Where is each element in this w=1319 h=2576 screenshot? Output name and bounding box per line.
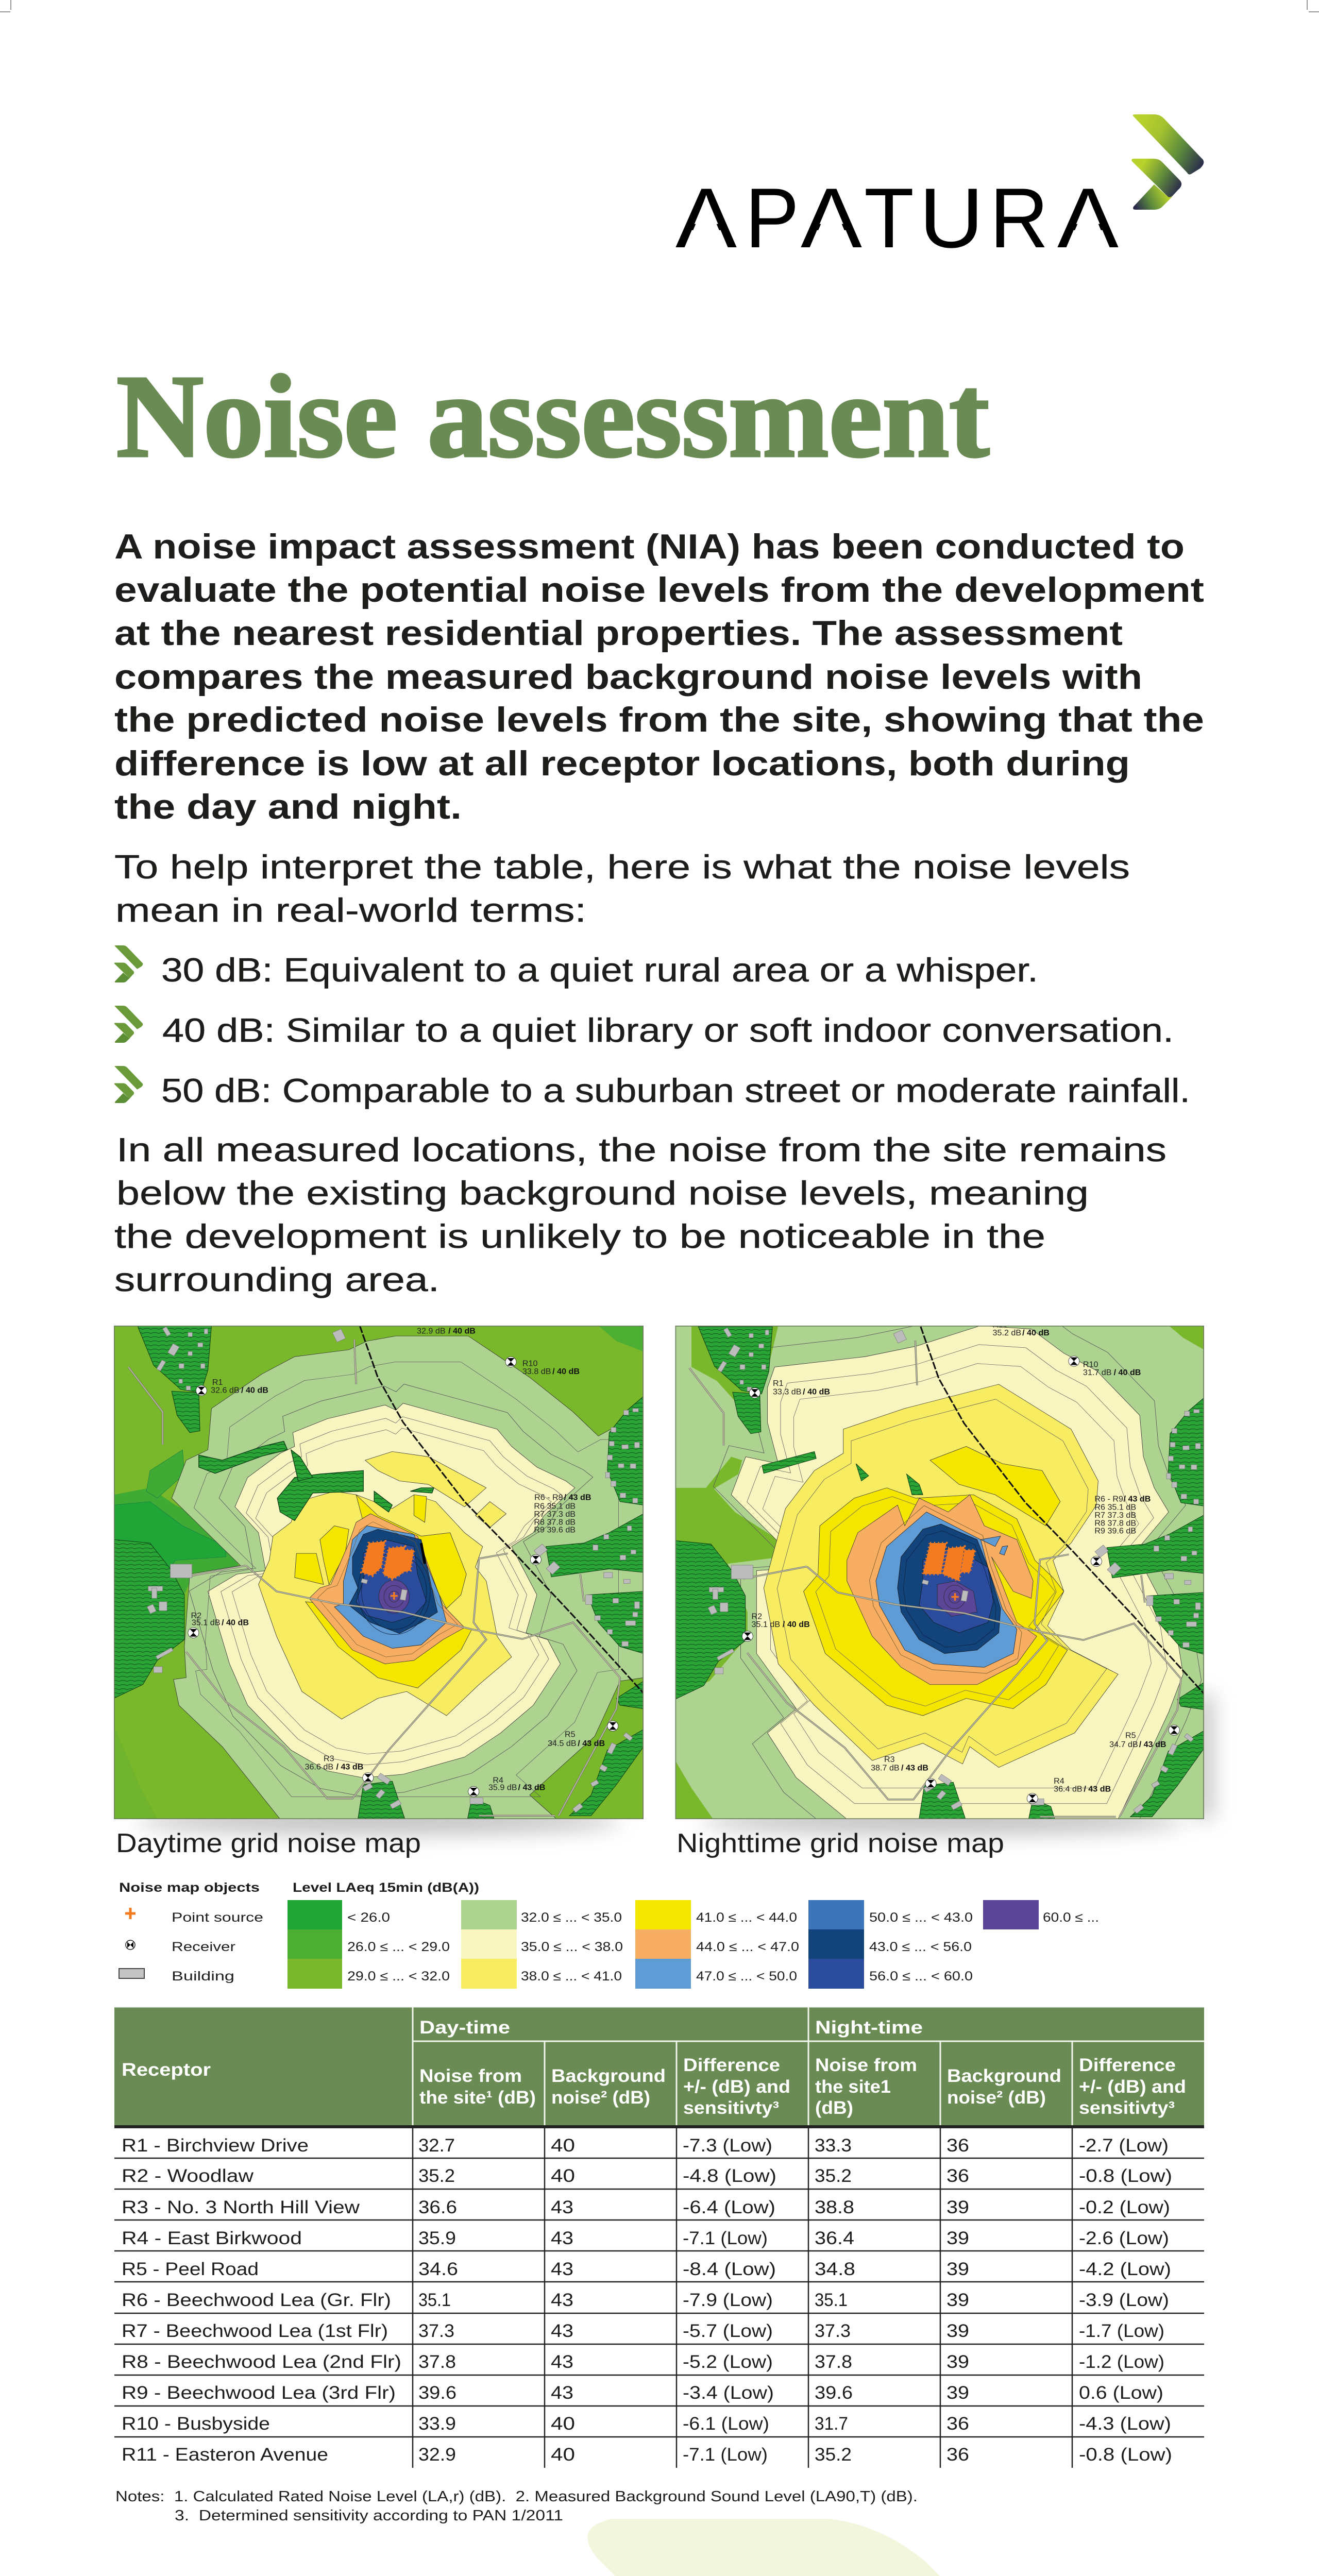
table row: R6: 43 — [551, 2290, 573, 2310]
caption: nighttime map: Nighttime grid noise map — [677, 1828, 1004, 1858]
logo: Apatura wordmark and chevron: R — [990, 171, 1049, 265]
icon: bullet chevron 50 dB — [114, 1066, 143, 1103]
map: sources array — [362, 1541, 414, 1579]
map band: 35-38 dB — [208, 1403, 575, 1778]
conclusion paragraph: the development is unlikely to be noticeable in the — [114, 1217, 1045, 1255]
table: noise levels by receptor — [114, 2007, 1204, 2468]
map labels: / 43 dB — [1124, 1495, 1151, 1504]
map band: 53-56 dB — [349, 1529, 437, 1634]
table row: R7: -5.7 (Low) — [683, 2321, 773, 2341]
map: roads, buildings and dense contours — [675, 1327, 1205, 1820]
map contours: core — [317, 1522, 458, 1657]
map band: 56-60 dB — [356, 1539, 427, 1622]
map labels: R5 — [1125, 1732, 1136, 1740]
map band: 32-35 dB — [172, 1336, 644, 1819]
map labels: 32.6 dB — [211, 1386, 240, 1395]
legend labels: 43.0 ≤ ... < 56.0 — [869, 1940, 972, 1954]
table row: R4: -7.1 (Low) — [683, 2228, 768, 2248]
map labels: R3 — [884, 1755, 895, 1764]
map labels: R9 39.6 dB — [534, 1526, 576, 1534]
map: green ridge — [199, 1441, 434, 1521]
table row: R2: -0.8 (Low) — [1079, 2166, 1172, 2186]
table row: R4: 39 — [946, 2228, 969, 2248]
table row: R8: 37.8 — [418, 2352, 456, 2372]
map labels: 35.1 dB — [192, 1619, 220, 1627]
map labels: / 40 dB — [241, 1386, 268, 1395]
text: 30 dB: 30 dB: Equivalent to a quiet rural area or a whisper. — [161, 951, 1038, 989]
map labels: R7 37.3 dB — [1094, 1511, 1136, 1520]
map band: 47-50 dB — [876, 1512, 1017, 1667]
table row: R2: 35.2 — [815, 2166, 852, 2186]
table header text — [122, 2018, 1186, 2118]
map labels: 32.9 dB — [417, 1327, 446, 1335]
table row: R5: 43 — [551, 2259, 573, 2279]
map labels: / 40 dB — [1022, 1329, 1050, 1337]
table row: R5: 39 — [946, 2259, 969, 2279]
table row: R1 — [122, 2136, 1169, 2156]
map: receivers — [742, 1356, 1179, 1804]
logo: Apatura wordmark and chevron: A — [675, 171, 737, 265]
legend heading: noise map objects: Noise map objects — [119, 1880, 260, 1895]
table row: R2: -4.8 (Low) — [683, 2166, 776, 2186]
table row: R8: -5.2 (Low) — [683, 2352, 773, 2372]
table row: R3: 36.6 — [418, 2197, 457, 2217]
table header text: (dB) — [815, 2098, 853, 2118]
map labels: / 43 dB — [578, 1739, 605, 1748]
map shadows — [137, 1695, 1213, 1835]
table row: R6 — [122, 2290, 1169, 2310]
logo: Apatura wordmark and chevron: P — [745, 171, 799, 265]
map band: 38-41 dB — [259, 1452, 512, 1719]
table row: R3: 43 — [551, 2197, 573, 2217]
map region: darker green outskirts — [114, 1326, 644, 1819]
table row: R11 — [122, 2445, 1172, 2465]
legend labels: 38.0 ≤ ... < 41.0 — [521, 1969, 622, 1984]
table row: R5: 34.8 — [815, 2259, 855, 2279]
table row: R7: 37.3 — [418, 2321, 454, 2341]
map labels: / 40 dB — [783, 1620, 810, 1629]
table header text: +/- (dB) and — [1079, 2077, 1186, 2097]
map labels: R10 — [1083, 1361, 1098, 1369]
intro paragraph: the day and night. — [114, 787, 462, 826]
map labels: / 40 dB — [448, 1327, 476, 1335]
map band: 53-56 dB — [898, 1524, 1001, 1653]
table row: R4: 35.9 — [418, 2228, 456, 2248]
intro paragraph: difference is low at all receptor locations, both during — [114, 744, 1130, 783]
map: roads, buildings and dense contours — [114, 1326, 644, 1819]
legend — [119, 1880, 1099, 1989]
table row: R7: -1.7 (Low) — [1079, 2321, 1164, 2341]
table rules — [114, 2127, 1204, 2468]
legend labels: < 26.0 — [347, 1910, 390, 1925]
table row: R6: -3.9 (Low) — [1079, 2290, 1169, 2310]
map contours: core — [870, 1505, 1022, 1673]
map band: 60+ dB — [937, 1581, 977, 1616]
logo: Apatura wordmark and chevron: U — [919, 171, 984, 265]
notes — [115, 2488, 918, 2524]
table row: R7: 39 — [946, 2321, 969, 2341]
text: point source: Point source — [172, 1910, 263, 1925]
map labels: 33.3 dB — [773, 1388, 802, 1396]
table header text: Noise from — [815, 2055, 917, 2075]
table row: R11: -0.8 (Low) — [1079, 2445, 1172, 2465]
table row: R3 — [122, 2197, 1170, 2217]
map: sources array — [923, 1543, 975, 1581]
map labels: 36.6 dB — [305, 1763, 333, 1771]
map labels: 35.2 dB — [993, 1329, 1021, 1337]
table row: R11: -7.1 (Low) — [683, 2445, 768, 2465]
legend labels: 50.0 ≤ ... < 43.0 — [869, 1910, 973, 1925]
table row: R10: 40 — [551, 2414, 575, 2434]
table row: R11: 35.2 — [815, 2445, 852, 2465]
map: daytime grid noise map — [114, 1326, 644, 1819]
map band: 44-47 dB — [309, 1514, 465, 1664]
table row: R7 — [122, 2321, 1164, 2341]
map labels: R7 37.3 dB — [534, 1510, 576, 1519]
map labels: 38.7 dB — [871, 1764, 900, 1772]
table row: R11: 36 — [946, 2445, 969, 2465]
logo: Apatura wordmark and chevron: T — [864, 171, 914, 265]
table row: R6: -7.9 (Low) — [683, 2290, 773, 2310]
table header text: the site¹ (dB) — [419, 2088, 536, 2108]
interpretation lead-in: To help interpret the table, here is what the noise levels — [114, 848, 1130, 886]
table row: R4: 43 — [551, 2228, 573, 2248]
table row: R1: 32.7 — [418, 2136, 455, 2156]
table row: R9 — [122, 2383, 1163, 2403]
table row: R4 — [122, 2228, 1169, 2248]
map labels: R6 35.1 dB — [1094, 1503, 1136, 1512]
table row: R2 — [122, 2166, 1172, 2186]
map labels: / 43 dB — [1084, 1785, 1111, 1793]
icon: bullet chevron 40 dB — [114, 1006, 143, 1043]
legend labels: 26.0 ≤ ... < 29.0 — [347, 1940, 450, 1954]
map labels: / 40 dB — [1114, 1368, 1141, 1377]
table header text: sensitivty³ — [1079, 2098, 1175, 2118]
text: 40 dB: 40 dB: Similar to a quiet library or soft indoor conversation. — [162, 1011, 1174, 1049]
logo: Apatura wordmark and chevron: A — [801, 171, 862, 265]
table header background — [114, 2007, 1204, 2125]
map labels: 31.7 dB — [1083, 1368, 1112, 1377]
background chevron: upper band — [587, 2519, 1308, 2576]
map labels: R10 — [522, 1360, 538, 1368]
table header text: Noise from — [419, 2066, 522, 2086]
table row: R6: R6 - Beechwood Lea (Gr. Flr) — [122, 2290, 391, 2310]
table header text: Background — [551, 2066, 666, 2086]
map labels: 33.8 dB — [522, 1367, 551, 1376]
table header text: Day-time — [419, 2018, 510, 2038]
icon: bullet chevron 30 dB — [114, 945, 143, 982]
table row: R8: R8 - Beechwood Lea (2nd Flr) — [122, 2352, 401, 2372]
table row: R3: R3 - No. 3 North Hill View — [122, 2197, 360, 2217]
map labels: R2 — [752, 1613, 762, 1621]
conclusion paragraph: below the existing background noise levels, meaning — [116, 1174, 1089, 1212]
text: 50 dB: 50 dB: Comparable to a suburban street or moderate rainfall. — [161, 1072, 1190, 1109]
table header text: Difference — [683, 2055, 780, 2075]
table header text: Background — [947, 2066, 1061, 2086]
legend labels: 29.0 ≤ ... < 32.0 — [347, 1969, 450, 1984]
logo: Apatura wordmark and chevron: A — [1057, 171, 1119, 265]
map labels: 35.9 dB — [488, 1784, 517, 1792]
table row: R5: -4.2 (Low) — [1079, 2259, 1171, 2279]
map labels: R4 — [1054, 1777, 1064, 1786]
intro paragraph: the predicted noise levels from the site, showing that the — [114, 700, 1204, 739]
legend labels — [347, 1910, 1099, 1984]
icon: receiver — [126, 1940, 135, 1950]
icon: building — [119, 1969, 144, 1978]
map labels: / 43 dB — [564, 1494, 591, 1502]
legend labels: 56.0 ≤ ... < 60.0 — [869, 1969, 973, 1984]
table header lines — [114, 2007, 1204, 2125]
map labels: / 40 dB — [552, 1367, 580, 1376]
table row: R5: 34.6 — [418, 2259, 458, 2279]
map band: 47-50 dB — [334, 1526, 447, 1648]
table row: R8 — [122, 2352, 1164, 2372]
map labels — [191, 1327, 605, 1792]
interpretation lead-in: mean in real-world terms: — [115, 891, 586, 929]
map band: 44-47 dB — [847, 1495, 1037, 1685]
table row: R5 — [122, 2259, 1171, 2279]
map band: 60+ dB — [379, 1580, 409, 1613]
table row: R1: -2.7 (Low) — [1079, 2136, 1169, 2156]
table row: R9: -3.4 (Low) — [683, 2383, 774, 2403]
map labels: R8 37.8 dB — [534, 1518, 576, 1527]
table row: R2: 36 — [946, 2166, 969, 2186]
map labels — [752, 1321, 1166, 1793]
table header text: Night-time — [815, 2018, 923, 2038]
table row: R7: 43 — [551, 2321, 573, 2341]
table header text: noise² (dB) — [551, 2088, 650, 2108]
map labels: R2 — [191, 1612, 201, 1620]
table row: R3: -6.4 (Low) — [683, 2197, 775, 2217]
map: tree strips — [762, 1452, 923, 1495]
map labels: / 40 dB — [803, 1388, 830, 1396]
table header text: +/- (dB) and — [683, 2077, 790, 2097]
map band: 56-60 dB — [919, 1550, 993, 1633]
legend swatches — [288, 1900, 1039, 1989]
table row: R4: 36.4 — [815, 2228, 854, 2248]
table row: R9: 0.6 (Low) — [1079, 2383, 1163, 2403]
legend labels: 44.0 ≤ ... < 47.0 — [696, 1940, 799, 1954]
table row: R7: 37.3 — [815, 2321, 851, 2341]
table row: R11: R11 - Easteron Avenue — [122, 2445, 328, 2465]
conclusion paragraph: In all measured locations, the noise from the site remains — [116, 1131, 1166, 1168]
legend heading: level: Level LAeq 15min (dB(A)) — [293, 1880, 479, 1895]
legend labels: 32.0 ≤ ... < 35.0 — [521, 1910, 622, 1925]
table header text: Receptor — [122, 2060, 211, 2080]
table row: R10: 31.7 — [815, 2414, 848, 2434]
map labels: R4 — [493, 1776, 503, 1785]
table row: R5: R5 - Peel Road — [122, 2259, 259, 2279]
table row: R4: R4 - East Birkwood — [122, 2228, 302, 2248]
notes: 3. Determined sensitivity according to PAN 1/2011 — [175, 2507, 563, 2524]
table row: R6: 35.1 — [815, 2290, 848, 2310]
title: Noise assessment — [116, 351, 989, 482]
table row: R1: -7.3 (Low) — [683, 2136, 772, 2156]
table row: R9: 39 — [946, 2383, 969, 2403]
conclusion paragraph — [114, 1131, 1166, 1298]
table row: R3: 38.8 — [815, 2197, 854, 2217]
legend labels: 60.0 ≤ ... — [1043, 1910, 1099, 1925]
table row: R10: -4.3 (Low) — [1079, 2414, 1171, 2434]
table row: R1: R1 - Birchview Drive — [122, 2136, 309, 2156]
conclusion paragraph: surrounding area. — [114, 1261, 439, 1298]
table row: R10: 33.9 — [418, 2414, 456, 2434]
table header text: Difference — [1079, 2055, 1176, 2075]
map labels: / 43 dB — [1139, 1740, 1166, 1749]
table row: R9: 43 — [551, 2383, 573, 2403]
table row: R11: 32.9 — [418, 2445, 456, 2465]
table row: R2: 35.2 — [418, 2166, 455, 2186]
map contours: outer — [189, 1362, 619, 1797]
icon: point source — [125, 1908, 136, 1919]
table row: R8: 37.8 — [815, 2352, 852, 2372]
map labels: R11 — [993, 1321, 1007, 1329]
intro paragraph: at the nearest residential properties. The assessment — [114, 614, 1123, 653]
table row: R11: 40 — [551, 2445, 575, 2465]
table row: R8: 43 — [551, 2352, 573, 2372]
intro paragraph — [114, 527, 1204, 826]
text: receiver: Receiver — [172, 1940, 235, 1954]
intro paragraph: compares the measured background noise levels with — [114, 657, 1142, 697]
map band: 38-41 dB — [764, 1384, 1118, 1768]
intro paragraph: A noise impact assessment (NIA) has been conducted to — [114, 527, 1185, 566]
table row: R8: -1.2 (Low) — [1079, 2352, 1164, 2372]
caption: daytime map: Daytime grid noise map — [116, 1828, 421, 1858]
interpretation lead-in — [114, 848, 1130, 929]
table row: R2: R2 - Woodlaw — [122, 2166, 254, 2186]
map labels: R1 — [773, 1380, 784, 1388]
table row: R1: 36 — [946, 2136, 969, 2156]
table row: R6: 39 — [946, 2290, 969, 2310]
intro paragraph: evaluate the potential noise levels from the development — [114, 570, 1204, 609]
map labels: 34.7 dB — [1109, 1740, 1138, 1749]
map: nighttime grid noise map — [675, 1321, 1204, 1819]
map labels: R3 — [324, 1755, 334, 1763]
map labels: R5 — [565, 1731, 576, 1739]
map region: green outskirts — [675, 1326, 1204, 1819]
table row: R1: 33.3 — [815, 2136, 852, 2156]
table row: R9: 39.6 — [815, 2383, 853, 2403]
map band: 41-44 dB — [295, 1495, 472, 1688]
legend labels: 41.0 ≤ ... < 44.0 — [696, 1910, 797, 1925]
legend labels: 47.0 ≤ ... < 50.0 — [696, 1969, 797, 1984]
table row: R9: 39.6 — [418, 2383, 456, 2403]
table row: R10 — [122, 2414, 1171, 2434]
map band: 35-38 dB — [731, 1326, 1183, 1819]
map labels: R6 - R9 — [534, 1494, 563, 1502]
table row: R10: -6.1 (Low) — [683, 2414, 769, 2434]
map labels: / 43 dB — [901, 1764, 928, 1772]
map labels: R1 — [212, 1379, 223, 1387]
table row: R4: -2.6 (Low) — [1079, 2228, 1169, 2248]
table row: R7: R7 - Beechwood Lea (1st Flr) — [122, 2321, 388, 2341]
table header text: sensitivty³ — [683, 2098, 779, 2118]
map contours: yellow — [777, 1399, 1107, 1755]
text: building: Building — [172, 1969, 234, 1984]
table row: R3: 39 — [946, 2197, 969, 2217]
table row: R3: -0.2 (Low) — [1079, 2197, 1170, 2217]
table row: R2: 40 — [551, 2166, 575, 2186]
map contours: outer — [713, 1304, 1202, 1837]
table header text: noise² (dB) — [947, 2088, 1046, 2108]
table row: R10: 36 — [946, 2414, 969, 2434]
map labels: R9 39.6 dB — [1094, 1527, 1136, 1535]
map band: 41-44 dB — [804, 1446, 1068, 1716]
map labels: R6 35.1 dB — [534, 1502, 576, 1511]
map labels: 34.5 dB — [548, 1739, 577, 1748]
map: receivers — [188, 1357, 618, 1797]
table row: R9: R9 - Beechwood Lea (3rd Flr) — [122, 2383, 396, 2403]
bullet list: noise levels — [114, 945, 1190, 1109]
map labels: 35.1 dB — [752, 1620, 780, 1629]
map labels: R6 - R9 — [1094, 1495, 1123, 1504]
map labels: / 43 dB — [518, 1784, 545, 1792]
legend labels: 35.0 ≤ ... < 38.0 — [521, 1940, 623, 1954]
map labels: / 43 dB — [336, 1763, 363, 1771]
table row: R6: 35.1 — [418, 2290, 451, 2310]
table row: R8: 39 — [946, 2352, 969, 2372]
table row: R5: -8.4 (Low) — [683, 2259, 776, 2279]
map labels: R8 37.8 dB — [1094, 1519, 1136, 1528]
map labels: 36.4 dB — [1054, 1785, 1083, 1793]
notes: Notes: 1. Calculated Rated Noise Level (LA,r) (dB). 2. Measured Background Sound Level (LA90,T) (dB). — [115, 2488, 918, 2505]
logo: Apatura wordmark and chevron — [675, 114, 1204, 265]
table row: R1: 40 — [551, 2136, 575, 2156]
table header text: the site1 — [815, 2077, 891, 2097]
table row: R10: R10 - Busbyside — [122, 2414, 270, 2434]
map labels: / 40 dB — [222, 1619, 249, 1627]
